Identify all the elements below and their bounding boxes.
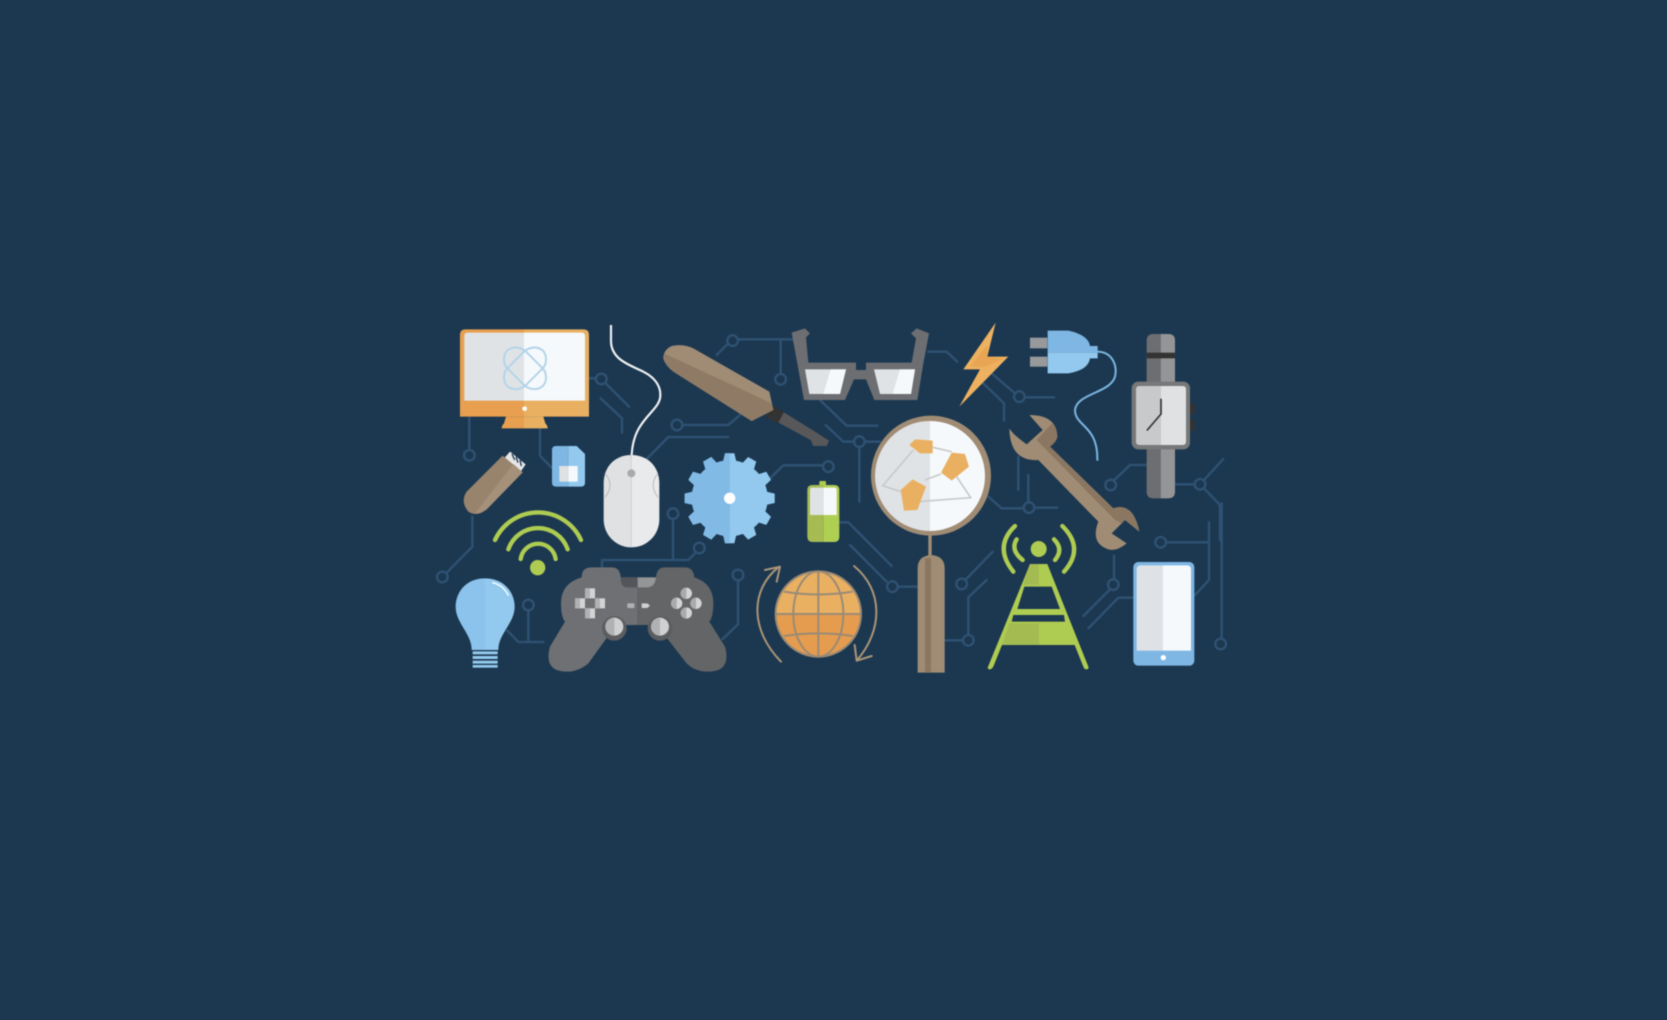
icon: light bulb — [456, 578, 515, 668]
icon: mouse cable — [611, 325, 660, 455]
icon: wristwatch — [1132, 334, 1195, 498]
icon: tablet — [1133, 562, 1194, 666]
icon: globe — [776, 571, 861, 657]
icon: lightning bolt — [959, 323, 1008, 407]
icon: gear — [685, 453, 775, 543]
icon: signal tower — [988, 526, 1089, 669]
icon: battery — [807, 481, 839, 542]
icon: SD card — [552, 446, 585, 487]
icon: desktop monitor — [460, 329, 589, 428]
icon: wrench — [1009, 415, 1139, 550]
icon: wifi signal — [495, 512, 581, 575]
icon: magnifying glass — [871, 416, 991, 673]
icon: computer mouse — [604, 455, 659, 547]
icon: game controller — [549, 567, 726, 672]
circuit traces — [437, 335, 1226, 649]
icon: USB stick — [464, 452, 526, 514]
icon: screwdriver — [663, 345, 829, 446]
icon: glasses — [792, 328, 929, 400]
arrow: globe right — [854, 566, 876, 661]
arrow: globe left — [757, 567, 781, 662]
icon: power plug — [1030, 331, 1116, 461]
